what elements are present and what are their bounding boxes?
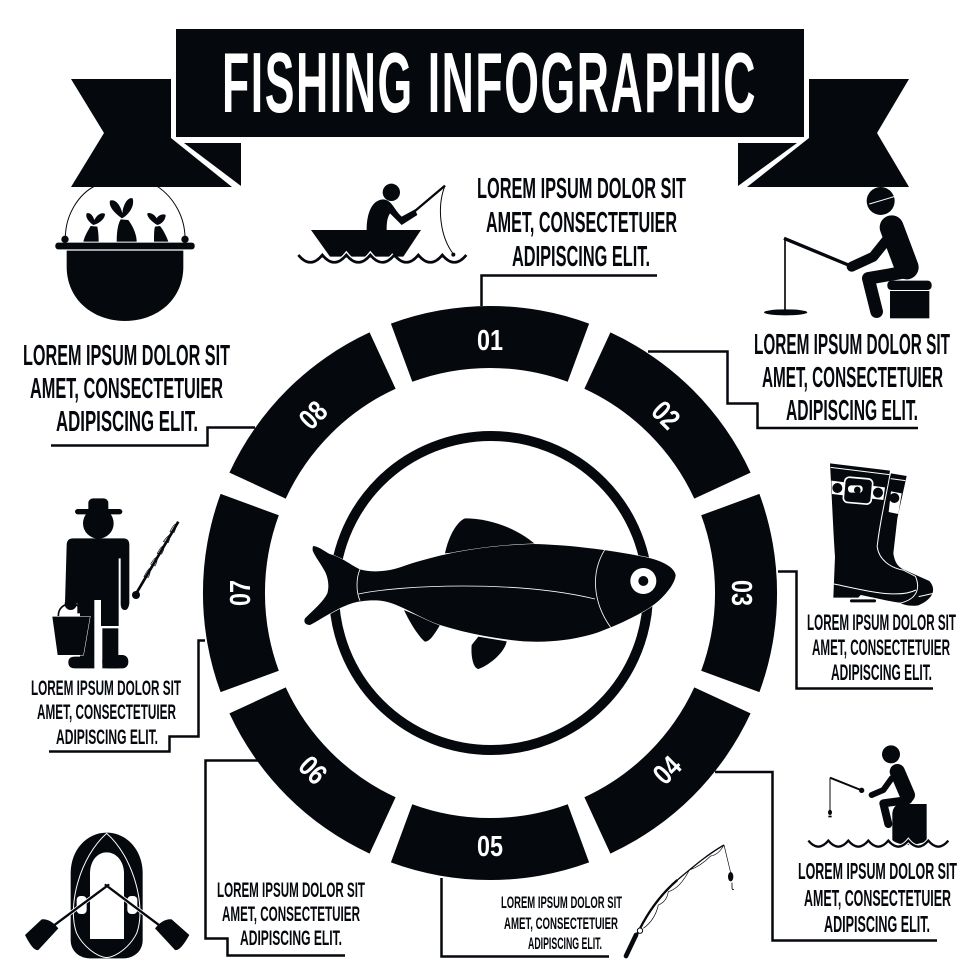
text: item 04	[798, 858, 957, 937]
text: item 06: AMET, CONSECTETUIER	[222, 903, 360, 926]
connector 07	[49, 640, 205, 752]
icon: bucket of fish	[55, 186, 195, 321]
text: item 08: LOREM IPSUM DOLOR SIT	[23, 340, 230, 372]
text: item 08: AMET, CONSECTETUIER	[30, 373, 223, 405]
text: item 05: LOREM IPSUM DOLOR SIT	[501, 893, 622, 912]
segmented ring: 03	[725, 580, 757, 606]
icon: rubber boots	[830, 463, 933, 606]
segmented ring: 04	[647, 750, 688, 791]
text: item 06	[217, 879, 365, 950]
text: item 05: AMET, CONSECTETUIER	[504, 914, 618, 933]
text: item 01: LOREM IPSUM DOLOR SIT	[477, 173, 686, 205]
segmented ring: 05	[477, 831, 503, 863]
item 05	[442, 845, 734, 956]
connector 06	[206, 760, 345, 956]
text: item 02	[754, 329, 950, 427]
text: item 08	[23, 340, 230, 438]
text: item 07: LOREM IPSUM DOLOR SIT	[31, 677, 181, 700]
text: item 07: ADIPISCING ELIT.	[56, 726, 158, 749]
item 04	[715, 745, 957, 940]
connector 04	[715, 772, 937, 940]
connector 05	[442, 878, 609, 956]
text: item 05: ADIPISCING ELIT.	[528, 934, 602, 953]
connector 01	[482, 276, 657, 306]
segmented ring	[203, 306, 777, 880]
text: item 01	[477, 173, 686, 273]
segmented ring: 07	[225, 580, 257, 606]
connector 03	[778, 572, 933, 688]
item 02	[648, 187, 950, 428]
item 03	[778, 463, 956, 688]
segmented ring: 06	[292, 750, 333, 791]
icon: standing fisherman with bucket	[52, 498, 178, 668]
center circle with fish	[304, 436, 676, 750]
segmented ring: 08	[293, 395, 334, 436]
text: item 05	[501, 893, 622, 953]
icon: inflatable raft with oars	[25, 833, 189, 958]
connector 08	[51, 428, 255, 446]
icon: fishing rod	[626, 845, 734, 956]
segmented ring: 02	[645, 395, 686, 436]
text: item 08: ADIPISCING ELIT.	[56, 406, 198, 438]
text: item 06: LOREM IPSUM DOLOR SIT	[217, 879, 365, 902]
text: item 01: ADIPISCING ELIT.	[512, 241, 650, 273]
icon: fisherman in boat	[298, 184, 466, 262]
title banner	[71, 29, 909, 187]
icon: ice fisherman	[764, 187, 932, 318]
connector 02	[648, 352, 918, 428]
text: item 03	[807, 610, 956, 685]
text: item 06: ADIPISCING ELIT.	[240, 927, 342, 950]
item 08	[23, 186, 255, 446]
item 06	[25, 760, 365, 958]
item 01	[298, 173, 686, 306]
text: item 07: AMET, CONSECTETUIER	[37, 701, 176, 724]
text: item 07	[31, 677, 181, 749]
text: item 01: AMET, CONSECTETUIER	[486, 207, 677, 239]
segmented ring: 01	[477, 325, 503, 357]
icon: pier fisherman	[808, 745, 948, 847]
item 07	[31, 498, 205, 752]
